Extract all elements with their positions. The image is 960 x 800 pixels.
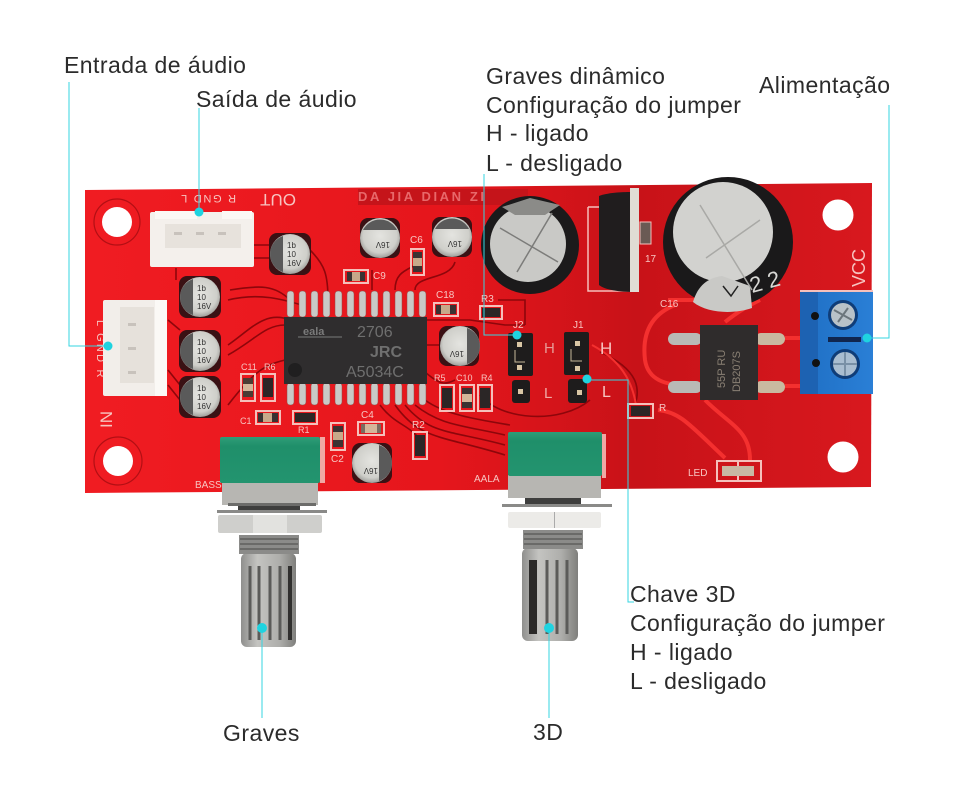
capacitor: 16V row: 10 xyxy=(197,293,206,302)
silkscreen labels: BASS xyxy=(195,480,222,491)
silkscreen labels: AALA xyxy=(474,474,500,485)
silkscreen labels: R3 xyxy=(481,294,494,305)
capacitor: 16V row: 10 xyxy=(197,347,206,356)
silkscreen labels: C2 xyxy=(331,454,344,465)
connector: audio output xyxy=(150,211,254,267)
capacitor: 16V row: 1b xyxy=(197,284,206,293)
potentiometer: bass xyxy=(217,437,327,647)
silkscreen labels: R1 xyxy=(298,425,310,435)
bright traces right xyxy=(592,300,805,460)
IC pins xyxy=(287,291,426,405)
callout: chave 3D: Chave 3D xyxy=(630,581,736,607)
silkscreen labels: 17 xyxy=(645,254,657,265)
capacitor: 16V row xyxy=(179,217,480,483)
capacitor: 16V row: 16V xyxy=(363,466,378,475)
silkscreen: board name: DA JIA DIAN ZI xyxy=(358,189,487,204)
callout: alimentação xyxy=(759,72,891,342)
capacitor: 16V row: 16V xyxy=(287,259,302,268)
silkscreen labels: R2 xyxy=(412,420,425,431)
callout: graves dinâmico xyxy=(484,63,741,340)
silkscreen labels: J1 xyxy=(573,320,584,331)
callout: graves dinâmico: Graves dinâmico xyxy=(486,63,665,89)
large capacitor right xyxy=(663,177,793,312)
callout: alimentação: Alimentação xyxy=(759,72,891,98)
silkscreen labels: C6 xyxy=(410,235,423,246)
callout: chave 3D: L - desligado xyxy=(630,668,767,694)
capacitor: 16V row: 16V xyxy=(449,349,464,358)
screw terminal xyxy=(800,290,873,394)
callout: 3D: 3D xyxy=(533,719,563,745)
silkscreen labels: L GND R xyxy=(94,320,106,380)
silkscreen labels: C1 xyxy=(240,416,252,426)
jumper J1 xyxy=(564,332,589,403)
silkscreen labels: R GND L xyxy=(179,192,236,204)
capacitor: 16V row: 16V xyxy=(197,356,212,365)
IC chip xyxy=(284,291,427,405)
capacitor: 16V row: 1b xyxy=(197,338,206,347)
callout: chave 3D: H - ligado xyxy=(630,639,733,665)
capacitor: 16V row: 16V xyxy=(197,302,212,311)
callout: 3D xyxy=(533,623,563,745)
large capacitor right: 2 2 xyxy=(747,266,783,298)
silkscreen labels: IN xyxy=(97,411,116,428)
callout: graves dinâmico: Configuração do jumper xyxy=(486,92,741,118)
callout: graves dinâmico: L - desligado xyxy=(486,150,623,176)
callout: entrada de áudio xyxy=(64,52,246,350)
callout: graves: Graves xyxy=(223,720,300,746)
silkscreen labels xyxy=(94,190,869,491)
IC markings: JRC xyxy=(370,344,402,361)
capacitor: 16V row: 10 xyxy=(287,250,296,259)
silkscreen labels: H xyxy=(600,339,612,358)
SMD parts xyxy=(241,249,761,481)
silkscreen labels: R6 xyxy=(264,362,276,372)
rectifier DB207S: 55P RU xyxy=(716,350,728,388)
silkscreen labels: R4 xyxy=(481,373,493,383)
silkscreen labels: VCC xyxy=(849,249,869,287)
silkscreen labels: R5 xyxy=(434,373,446,383)
silkscreen labels: H xyxy=(544,340,555,357)
silkscreen labels: R xyxy=(659,403,666,414)
silkscreen labels: J2 xyxy=(513,320,524,331)
callout: chave 3D: Configuração do jumper xyxy=(630,610,885,636)
IC markings: A5034C xyxy=(346,364,404,381)
silkscreen labels: C9 xyxy=(373,271,386,282)
IC markings: eala xyxy=(303,326,325,338)
silkscreen labels: C11 xyxy=(241,362,257,372)
IC markings xyxy=(298,324,404,381)
connector: audio input xyxy=(103,300,167,396)
callout: graves xyxy=(223,623,300,746)
jumper J2 xyxy=(508,333,533,403)
callout: graves dinâmico: H - ligado xyxy=(486,120,589,146)
capacitor: 16V row: 16V xyxy=(447,239,462,248)
silkscreen labels: L xyxy=(602,384,611,401)
rectifier DB207S: DB207S xyxy=(731,351,743,392)
panel: circuit board xyxy=(85,183,872,493)
callout: saída de áudio xyxy=(194,86,357,216)
silkscreen labels: C16 xyxy=(660,299,679,310)
silkscreen labels: LED xyxy=(688,468,707,479)
capacitor: 16V row: 16V xyxy=(197,402,212,411)
copper traces left xyxy=(168,245,637,455)
capacitor: 16V row: 1b xyxy=(197,384,206,393)
large capacitor left xyxy=(481,196,579,294)
voltage regulator xyxy=(588,188,651,292)
silkscreen labels: C10 xyxy=(456,373,473,383)
silkscreen labels: C18 xyxy=(436,290,455,301)
silkscreen labels: C4 xyxy=(361,410,374,421)
capacitor: 16V row: 10 xyxy=(197,393,206,402)
callout: entrada de áudio: Entrada de áudio xyxy=(64,52,246,78)
silkscreen labels: L xyxy=(544,385,552,402)
IC markings: 2706 xyxy=(357,324,393,341)
callout: chave 3D xyxy=(582,374,885,694)
potentiometer: 3D xyxy=(502,432,612,641)
rectifier DB207S xyxy=(668,325,785,400)
mounting holes xyxy=(94,199,858,485)
silkscreen labels: OUT xyxy=(260,190,296,209)
callout: saída de áudio: Saída de áudio xyxy=(196,86,357,112)
capacitor: 16V row: 1b xyxy=(287,241,296,250)
capacitor: 16V row: 16V xyxy=(375,240,390,249)
